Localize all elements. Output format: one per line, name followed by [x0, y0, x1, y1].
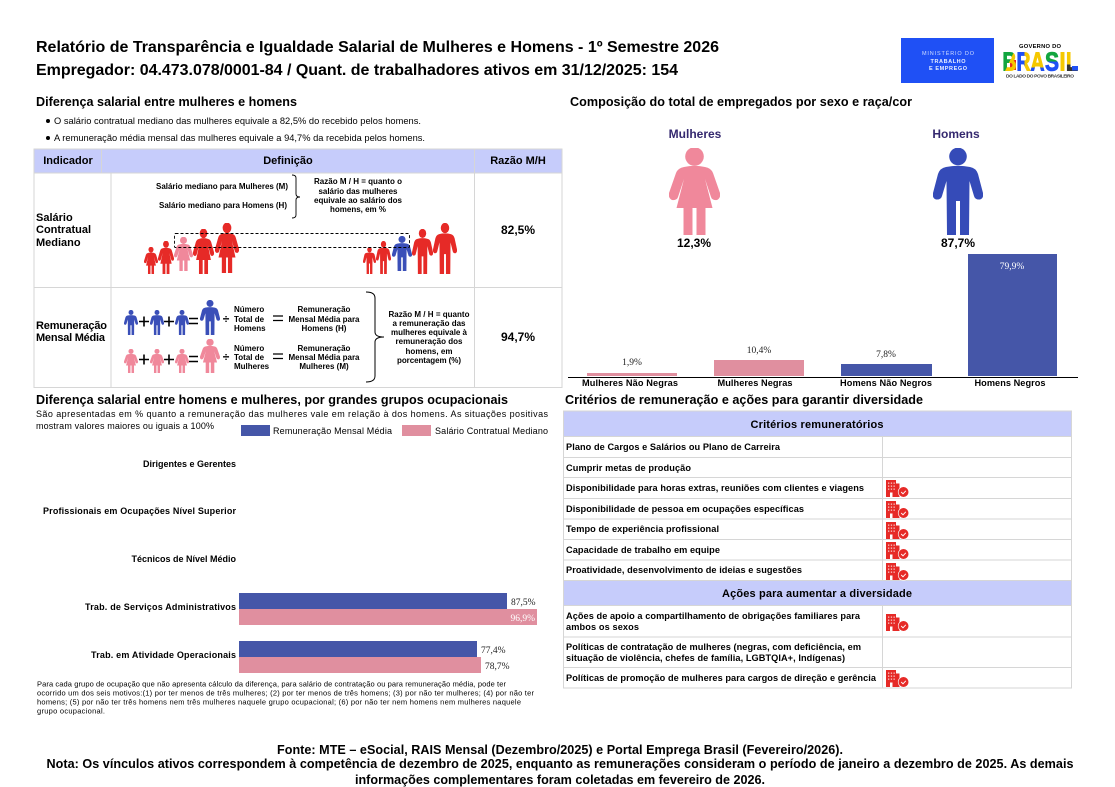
- bar chart: composition: 10,4%: [747, 346, 771, 356]
- formula: men: Total de: [234, 315, 265, 324]
- definition: razão text: homens, em %: [330, 205, 386, 214]
- footnote: ocorrido um dos seis motivos:(1) por ter menos de três mulheres; (2) por ter menos de três homens; (3) por não ter mulheres; (4) por não ter: [37, 688, 534, 698]
- panel: indicator table: Definição: [263, 155, 313, 167]
- heading: critérios: Critérios de remuneração e ações para garantir diversidade: [565, 393, 923, 407]
- row label: remuneração mensal média: Remuneração: [36, 320, 107, 332]
- legend: [241, 425, 548, 436]
- criteria rows: Capacidade de trabalho em equipe: [566, 545, 720, 555]
- logo: ministério do trabalho e emprego: MINISTÉRIO DO: [922, 50, 975, 57]
- heading: critérios remuneratórios: Critérios remuneratórios: [750, 419, 884, 431]
- formula: men: Remuneração: [298, 305, 351, 314]
- panel: indicator table: Razão M/H: [490, 155, 546, 167]
- value: 82,5%: 82,5%: [501, 223, 535, 237]
- category labels: Trab. de Serviços Administrativos: [85, 602, 236, 612]
- action rows: [566, 611, 877, 683]
- formula: men: Homens: [234, 324, 266, 333]
- logo: governo do brasil: GOVERNO DO: [1019, 44, 1061, 50]
- panel: criteria table: [563, 411, 1072, 688]
- title: Relatório de Transparência e Igualdade Salarial de Mulheres e Homens - 1º Semestre 2026: [36, 39, 719, 56]
- description: [36, 409, 548, 431]
- logo: governo do brasil: S: [1045, 46, 1059, 76]
- category labels: Trab. em Atividade Operacionais: [91, 650, 236, 660]
- footer notes: Fonte: MTE – eSocial, RAIS Mensal (Dezembro/2025) e Portal Emprega Brasil (Fevereiro/2026).: [277, 743, 843, 757]
- row label: salário contratual mediano: Salário: [36, 212, 73, 224]
- logo: ministério do trabalho e emprego: TRABALHO: [930, 59, 966, 65]
- bar chart: occupational groups: [239, 593, 537, 673]
- criteria rows: Proatividade, desenvolvimento de ideias e sugestões: [566, 565, 802, 575]
- formula: women: Número: [234, 344, 264, 353]
- definition: salário mediano labels: Salário mediano para Mulheres (M): [156, 182, 288, 191]
- figure: mulheres 12,3%: [669, 127, 722, 250]
- logo: governo do brasil: B: [1002, 46, 1016, 76]
- definition: salário mediano labels: Salário mediano para Homens (H): [159, 201, 287, 210]
- brace and razão text: Razão M / H = quanto: [388, 310, 470, 319]
- bar chart: occupational groups: 87,5%: [511, 598, 536, 608]
- bar chart: composition: Homens Negros: [974, 378, 1046, 388]
- category labels: Técnicos de Nível Médio: [131, 554, 236, 564]
- bar chart: composition: 1,9%: [622, 358, 642, 368]
- logo: governo do brasil: R: [1016, 46, 1031, 76]
- logo: governo do brasil: A: [1030, 46, 1045, 76]
- bar chart: composition: Mulheres Não Negras: [582, 378, 678, 388]
- panel: indicator table: [34, 149, 562, 388]
- bar chart: composition: Homens Não Negros: [840, 378, 932, 388]
- brace and razão text: homens, em: [406, 347, 452, 356]
- category labels: Dirigentes e Gerentes: [143, 459, 236, 469]
- legend: Remuneração Mensal Média: [273, 426, 392, 436]
- figure: homens 87,7%: [932, 127, 983, 250]
- formula: women: ÷: [223, 350, 230, 364]
- formula: women: Mulheres (M): [299, 362, 349, 371]
- logo: ministério do trabalho e emprego: E EMPREGO: [929, 66, 968, 72]
- brace and razão text: [366, 292, 470, 382]
- criteria rows: Disponibilidade de pessoa em ocupações específicas: [566, 504, 804, 514]
- action rows: Políticas de contratação de mulheres (negras, com deficiência, em: [566, 642, 861, 652]
- figure: homens 87,7%: Homens: [932, 127, 980, 141]
- brace and razão text: mulheres equivale à: [391, 328, 468, 337]
- brace and razão text: remuneração dos: [396, 337, 463, 346]
- logo: governo do brasil: [1002, 44, 1078, 80]
- formula: men: Mensal Média para: [288, 315, 360, 324]
- footer notes: informações complementares foram coletadas em fevereiro de 2026.: [355, 773, 765, 787]
- logo: governo do brasil: I: [1060, 46, 1066, 76]
- logo: governo do brasil: DO LADO DO POVO BRASILEIRO: [1006, 74, 1074, 80]
- footer notes: [46, 743, 1074, 787]
- figure: mulheres 12,3%: Mulheres: [669, 127, 722, 141]
- definition: razão text: [314, 177, 403, 214]
- bar chart: occupational groups: 77,4%: [481, 646, 506, 656]
- heading: ações: Ações para aumentar a diversidade: [722, 588, 912, 600]
- description: mostram valores maiores ou iguais a 100%: [36, 421, 214, 431]
- definition: razão text: equivale ao salário dos: [314, 196, 403, 205]
- action rows: ambos os sexos: [566, 622, 639, 632]
- bullet list: O salário contratual mediano das mulheres equivale a 82,5% do recebido pelos homens.: [54, 116, 421, 126]
- panel: indicator table: Indicador: [43, 155, 93, 167]
- formula: women: Mensal Média para: [288, 353, 360, 362]
- row label: salário contratual mediano: Contratual: [36, 224, 91, 236]
- criteria rows: Tempo de experiência profissional: [566, 524, 719, 534]
- criteria rows: Plano de Cargos e Salários ou Plano de Carreira: [566, 442, 781, 452]
- criteria rows: Disponibilidade para horas extras, reuniões com clientes e viagens: [566, 483, 864, 493]
- category labels: [43, 459, 236, 660]
- formula: women: Remuneração: [298, 344, 351, 353]
- formula: women: [124, 339, 360, 373]
- action rows: Ações de apoio a compartilhamento de obrigações familiares para: [566, 611, 861, 621]
- footnote: grupo ocupacional.: [37, 706, 105, 716]
- row label: remuneração mensal média: Mensal Média: [36, 332, 106, 344]
- definition: razão text: Razão M / H = quanto o: [314, 177, 402, 186]
- bar chart: composition: 79,9%: [1000, 262, 1024, 272]
- heading: diferença salarial: Diferença salarial entre mulheres e homens: [36, 95, 297, 109]
- description: São apresentadas em % quanto a remuneração das mulheres vale em relação à dos homens. As situações positivas: [36, 409, 548, 419]
- dashed median connector: [174, 234, 410, 248]
- figure: mulheres 12,3%: 12,3%: [677, 236, 711, 250]
- title: [36, 39, 719, 79]
- definition: razão text: salário das mulheres: [318, 187, 398, 196]
- footer notes: Nota: Os vínculos ativos correspondem à competência de dezembro de 2025, enquanto as remunerações consideram o período de janeiro a dezembro de 2025. As demais: [46, 757, 1074, 771]
- brace and razão text: a remuneração das: [392, 319, 466, 328]
- bar chart: composition: [568, 254, 1078, 388]
- row label: salário contratual mediano: [36, 212, 91, 249]
- footnote: [37, 680, 534, 716]
- footnote: Para cada grupo de ocupação que não apresenta cálculo da diferença, para salário de contratação ou para remuneração média, pode ter: [37, 680, 506, 688]
- category labels: Profissionais em Ocupações Nível Superior: [43, 506, 236, 516]
- action rows: Políticas de promoção de mulheres para cargos de direção e gerência: [566, 673, 877, 683]
- row label: salário contratual mediano: Mediano: [36, 237, 81, 249]
- heading: composição: Composição do total de empregados por sexo e raça/cor: [570, 95, 912, 109]
- bar chart: composition: 7,8%: [876, 350, 896, 360]
- formula: women: Total de: [234, 353, 265, 362]
- logo: ministério do trabalho e emprego: [901, 38, 994, 83]
- formula: men: Número: [234, 305, 264, 314]
- heading: grandes grupos ocupacionais: Diferença salarial entre homens e mulheres, por grandes grupos ocupacionais: [36, 393, 508, 407]
- formula: men: Homens (H): [302, 324, 347, 333]
- figure: homens 87,7%: 87,7%: [941, 236, 975, 250]
- icons: company check: [886, 480, 909, 687]
- brace and razão text: porcentagem (%): [397, 356, 461, 365]
- legend: Salário Contratual Mediano: [435, 426, 548, 436]
- logo: governo do brasil: L: [1066, 46, 1078, 76]
- criteria rows: [566, 442, 864, 575]
- value: 94,7%: 94,7%: [501, 330, 535, 344]
- formula: women: Mulheres: [234, 362, 270, 371]
- formula: men: [124, 300, 360, 335]
- bar chart: composition: Mulheres Negras: [718, 378, 792, 388]
- illustration: men ordered by salary: [363, 223, 457, 274]
- bar chart: occupational groups: 78,7%: [485, 662, 510, 672]
- bullet list: [46, 116, 425, 143]
- criteria rows: Cumprir metas de produção: [566, 463, 691, 473]
- footnote: homens; (5) por não ter três homens nem três mulheres naquele grupo ocupacional; (6) por não ter nem homens nem mulheres naquele: [37, 698, 521, 706]
- bar chart: occupational groups: 96,9%: [510, 614, 535, 624]
- title: Empregador: 04.473.078/0001-84 / Quant. de trabalhadores ativos em 31/12/2025: 154: [36, 62, 678, 79]
- bullet list: A remuneração média mensal das mulheres equivale a 94,7% da recebida pelos homens.: [54, 133, 425, 143]
- action rows: situação de violência, chefes de família, LGBTQIA+, Indígenas): [566, 653, 845, 663]
- definition: salário mediano labels: [156, 175, 300, 218]
- illustration: women ordered by salary: [144, 223, 239, 274]
- row label: remuneração mensal média: [36, 320, 107, 344]
- formula: men: ÷: [223, 312, 230, 326]
